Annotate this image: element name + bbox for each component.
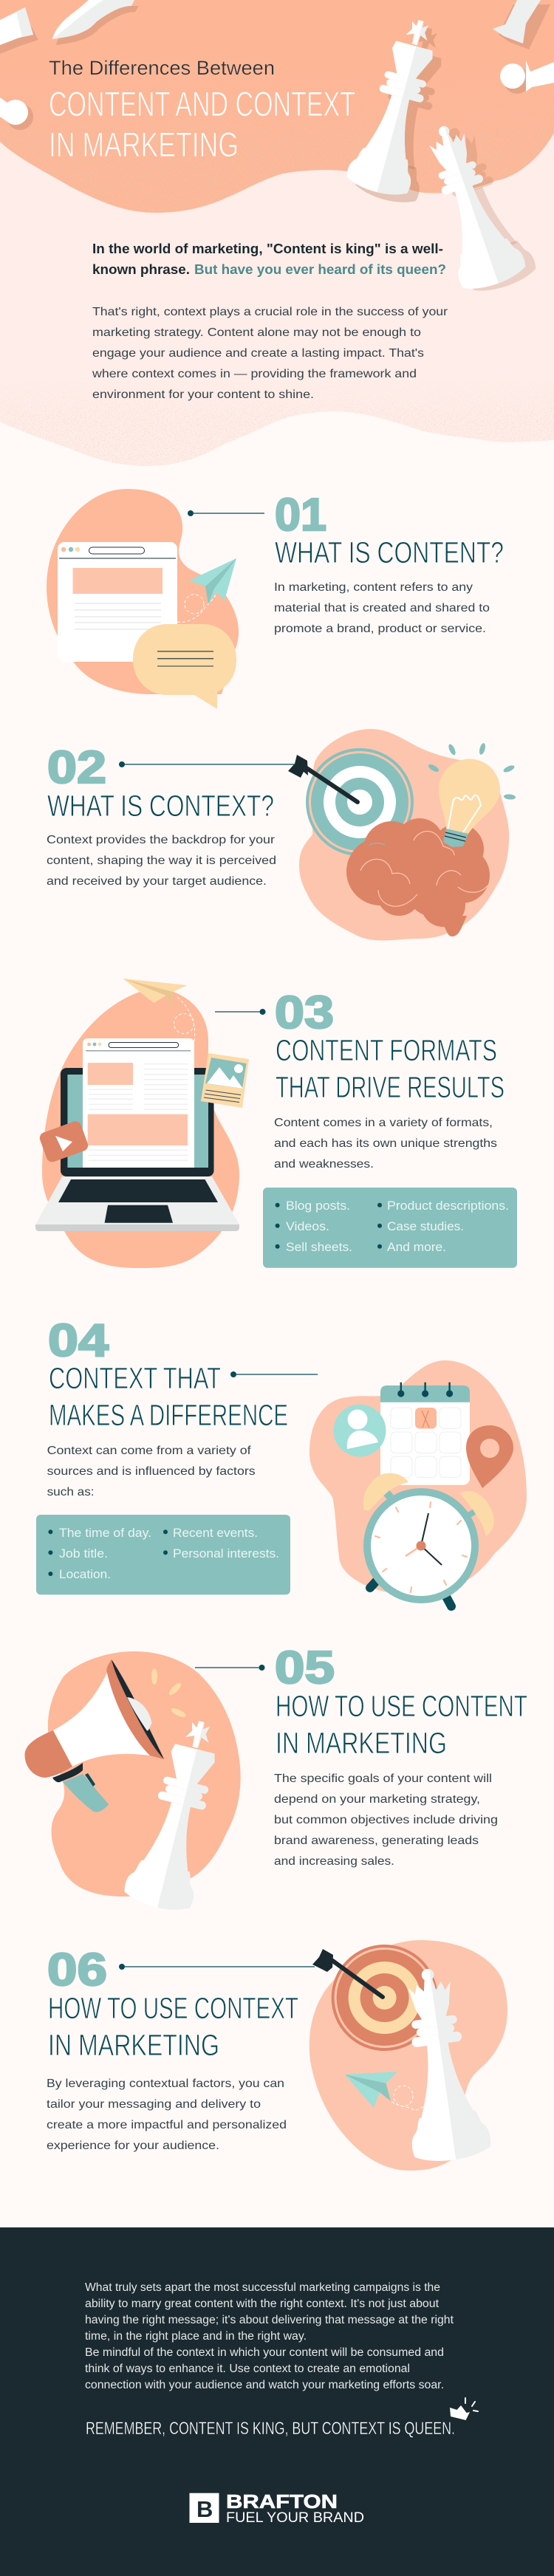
section 05 text: but common objectives include driving: [274, 1814, 498, 1826]
icon: alarm clock: [363, 1473, 494, 1606]
logo: Brafton: BRAFTON: [226, 2490, 338, 2512]
icon: paper plane: [344, 2072, 397, 2108]
icon: target: [332, 1945, 438, 2051]
icon: location pin: [466, 1425, 513, 1488]
text block: closing: having the right message; it's about delivering that message at the right: [85, 2314, 454, 2326]
panel: section 05 illustration: [24, 1651, 241, 1916]
panel: formats list: Product descriptions.: [387, 1199, 509, 1213]
section 04 text: MAKES A DIFFERENCE: [49, 1398, 288, 1432]
panel: footer: [0, 2227, 554, 2576]
icon: chess queen: [429, 126, 536, 291]
section 05 text: depend on your marketing strategy,: [274, 1793, 480, 1806]
icon: image card: [201, 1053, 249, 1108]
icon: rook top left: [0, 7, 38, 54]
section 03 text: Content comes in a variety of formats,: [274, 1117, 493, 1129]
text block: closing: ability to marry great content with the right context. It's not just about: [85, 2298, 440, 2310]
panel: section 03 illustration: [35, 979, 249, 1268]
text block: closing: time, in the right place and in the right way.: [85, 2330, 307, 2343]
section 05 text: The specific goals of your content will: [274, 1772, 492, 1785]
icon: bishop top left: [52, 0, 139, 45]
panel: formats list: Case studies.: [387, 1219, 464, 1233]
panel: formats list: Sell sheets.: [286, 1240, 352, 1254]
text block: intro: marketing strategy. Content alone may not be enough to: [92, 326, 421, 339]
icon: laptop: [35, 1068, 239, 1231]
text block: closing: What truly sets apart the most successful marketing campaigns is the: [85, 2281, 440, 2294]
section 03 text: and each has its own unique strengths: [274, 1137, 497, 1150]
connector 03: [215, 1009, 266, 1015]
section 06 text: IN MARKETING: [48, 2028, 219, 2062]
text block: intro: environment for your content to shine.: [92, 388, 314, 401]
panel: factors list: Personal interests.: [173, 1546, 279, 1561]
connector 04: [230, 1371, 318, 1377]
section 02 text: content, shaping the way it is perceived: [47, 854, 276, 867]
title: The Differences Between: [49, 57, 275, 79]
icon: speech bubble: [133, 624, 236, 709]
section 05 text: IN MARKETING: [276, 1726, 447, 1760]
section 02 text: WHAT IS CONTEXT?: [47, 789, 274, 823]
icon: pawn right: [500, 61, 554, 94]
panel: formats list: Videos.: [286, 1219, 329, 1233]
title: CONTENT AND CONTEXT: [49, 84, 355, 123]
section 01 text: 01: [275, 490, 326, 541]
icon: browser window: [58, 542, 177, 662]
panel: factors list: The time of day.: [59, 1526, 151, 1540]
panel: factors list: [36, 1515, 290, 1594]
icon: rook top right: [493, 0, 550, 49]
text block: intro: engage your audience and create a lasting impact. That's: [92, 347, 424, 360]
section 01 text: [274, 490, 504, 635]
text block: intro: known phrase.: [92, 262, 190, 277]
panel: formats list: And more.: [387, 1240, 446, 1254]
section 02 text: 02: [47, 742, 106, 793]
text block: intro: where context comes in — providing the framework and: [92, 368, 417, 380]
section 01 text: In marketing, content refers to any: [274, 581, 473, 594]
text block: intro: In the world of marketing, "Content is king" is a well-: [92, 242, 443, 256]
text block: intro: [92, 242, 448, 401]
icon: pawn left: [0, 97, 33, 130]
logo: Brafton: B: [196, 2496, 213, 2522]
text block: closing: think of ways to enhance it. Use context to create an emotional: [85, 2363, 410, 2375]
icon: video play button: [38, 1120, 89, 1164]
text block: closing: [85, 2281, 454, 2391]
icon: arrow: [288, 755, 358, 802]
section 06 text: [47, 1945, 298, 2152]
section 04 text: CONTEXT THAT: [49, 1361, 221, 1395]
icon: megaphone: [24, 1659, 164, 1812]
connector 05: [195, 1665, 264, 1671]
icon: small crown: [450, 2398, 478, 2420]
section 05 text: 05: [275, 1642, 335, 1693]
section 06 text: tailor your messaging and delivery to: [47, 2098, 261, 2111]
icon: light bulb: [439, 759, 500, 847]
icon: browser page: [83, 1038, 194, 1168]
section 06 text: By leveraging contextual factors, you can: [47, 2077, 284, 2090]
section 06 text: HOW TO USE CONTEXT: [48, 1991, 298, 2025]
panel: formats list: Blog posts.: [286, 1199, 350, 1213]
text block: closing: connection with your audience and watch your marketing efforts soar.: [85, 2379, 444, 2391]
icon: arrow: [312, 1949, 386, 1997]
section 02 text: Context provides the backdrop for your: [47, 834, 276, 846]
panel: hero header: [0, 0, 554, 517]
section 04 text: such as:: [47, 1486, 95, 1498]
icon: chess queen: [408, 1969, 490, 2161]
section 05 text: and increasing sales.: [274, 1855, 394, 1868]
connector 06: [119, 1964, 315, 1970]
section 01 text: material that is created and shared to: [274, 602, 490, 614]
section 06 text: 06: [47, 1945, 107, 1996]
panel: factors list: Location.: [59, 1567, 111, 1581]
section 03 text: and weaknesses.: [274, 1158, 374, 1171]
logo: Brafton: FUEL YOUR BRAND: [226, 2510, 364, 2526]
text block: intro: But have you ever heard of its queen?: [194, 262, 446, 277]
icon: chess king: [124, 1721, 215, 1910]
connector 02: [119, 761, 295, 767]
title: IN MARKETING: [49, 125, 239, 164]
section 04 text: [47, 1315, 288, 1498]
icon: brain: [346, 818, 490, 936]
panel: section 04 illustration: [310, 1360, 527, 1606]
panel: section 02 illustration: [288, 729, 516, 941]
section 05 text: [274, 1642, 527, 1868]
panel: section 06 illustration: [310, 1940, 507, 2171]
section 03 text: 03: [275, 987, 334, 1038]
icon: paper plane: [123, 979, 188, 1008]
text block: closing: Be mindful of the context in which your content will be consumed and: [85, 2346, 444, 2359]
section 04 text: Context can come from a variety of: [47, 1445, 251, 1457]
section 05 text: brand awareness, generating leads: [274, 1835, 479, 1847]
section 01 text: promote a brand, product or service.: [274, 623, 486, 635]
panel: section 01 illustration: [47, 489, 239, 709]
section 06 text: create a more impactful and personalized: [47, 2119, 287, 2131]
section 03 text: [274, 987, 505, 1171]
panel: formats list: [263, 1188, 517, 1268]
section 02 text: and received by your target audience.: [47, 875, 267, 888]
icon: calendar: [380, 1383, 470, 1485]
icon: person: [334, 1405, 386, 1456]
section 04 text: 04: [48, 1315, 109, 1366]
icon: paper plane: [189, 558, 236, 604]
panel: factors list: Recent events.: [173, 1526, 258, 1540]
icon: bulb rays: [427, 742, 516, 800]
icon: chess king: [347, 20, 442, 202]
text block: intro: That's right, context plays a crucial role in the success of your: [92, 306, 448, 318]
title: [49, 57, 355, 164]
panel: factors list: Job title.: [59, 1546, 108, 1561]
icon: megaphone rays: [151, 1668, 187, 1719]
logo: Brafton: [189, 2490, 364, 2526]
icon: target: [306, 748, 414, 856]
section 02 text: [47, 742, 276, 888]
section 04 text: sources and is influenced by factors: [47, 1465, 256, 1478]
connector 01: [188, 510, 264, 516]
section 06 text: experience for your audience.: [47, 2140, 219, 2152]
